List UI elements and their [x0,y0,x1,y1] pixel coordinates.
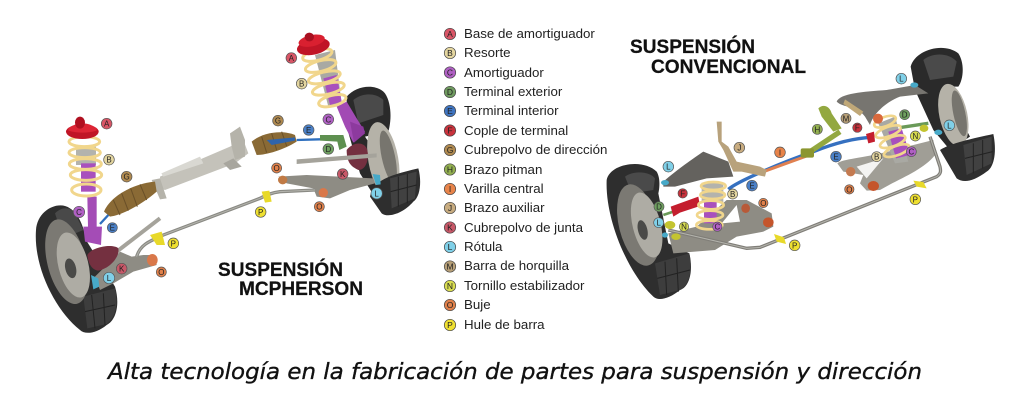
callouts: E [749,182,755,191]
callouts: G [124,173,130,182]
legend: O [447,300,454,310]
footer tagline: Alta tecnología en la fabricación de partes para suspensión y dirección [106,360,922,385]
legend: Cubrepolvo de dirección [464,142,607,157]
legend: G [447,145,453,155]
legend: Barra de horquilla [464,258,570,273]
callouts: L [656,219,661,228]
legend: Resorte [464,45,511,60]
far lower arm [837,140,935,191]
callouts: F [680,189,685,198]
callouts: O [158,268,164,277]
legend: Varilla central [464,181,544,196]
callouts: J [737,144,741,153]
callouts: P [913,195,918,204]
legend: Cubrepolvo de junta [464,220,584,235]
left strut with spring [66,117,102,245]
callouts: N [912,132,918,141]
near wheel [607,164,691,299]
callouts: K [340,170,346,179]
callouts [73,53,382,284]
legend: L [448,242,453,252]
inner tie rods [100,139,320,224]
legend: N [447,281,453,291]
callouts: H [814,125,820,134]
stabilizer bar [137,176,328,257]
stabilizer bar [665,125,941,248]
callouts: B [106,156,112,165]
legend: B [447,48,453,58]
callouts: D [325,145,331,154]
legend: Cople de terminal [464,123,568,138]
far upper arm [837,85,928,125]
callouts: L [947,121,952,130]
callouts: E [833,153,839,162]
callouts: P [258,208,263,217]
title: Suspensión convencional [630,36,806,78]
callouts: O [760,199,766,208]
left control arm [95,218,160,290]
callouts: C [325,115,331,124]
callouts: O [316,203,322,212]
legend: Tornillo estabilizador [464,278,585,293]
callouts: L [666,163,671,172]
callouts: C [76,208,82,217]
legend: D [447,87,453,97]
steering linkage [663,99,928,217]
legend: Terminal exterior [464,84,563,99]
callouts: B [874,153,879,162]
callouts: O [274,164,280,173]
callouts: E [110,224,115,233]
callouts: D [656,203,662,212]
legend: E [447,106,453,116]
callouts: P [792,241,797,250]
legend: H [447,164,453,174]
left wheel [36,205,117,333]
bushings and ball joints [661,82,942,238]
legend: Brazo pitman [464,162,542,177]
steering rack [152,127,248,199]
legend: A [447,29,453,39]
left joint boot [87,246,119,271]
legend [444,26,607,332]
title: Suspensión McPherson [218,259,363,300]
legend: Base de amortiguador [464,26,595,41]
near upper arm [663,152,733,187]
diagram: McPherson suspension [36,32,420,333]
far wheel [911,48,995,181]
callouts: L [374,189,379,198]
legend: I [449,184,451,194]
right control arm [278,175,375,198]
title: Suspensión McPherson: MCPHERSON [239,279,363,300]
right strut with spring [295,32,365,143]
legend: Buje [464,297,491,312]
legend: Terminal interior [464,103,559,118]
legend: Hule de barra [464,317,545,332]
legend: K [447,222,453,232]
callouts: P [171,239,176,248]
callouts: A [289,54,295,63]
legend: Amortiguador [464,65,544,80]
callouts: A [104,120,110,129]
legend: M [446,262,454,272]
ball joint [91,275,99,289]
legend: P [447,320,453,330]
callouts: C [714,223,720,232]
diagram: conventional suspension [607,48,995,299]
callouts: F [855,124,860,133]
callouts: K [119,265,125,274]
callouts: E [306,126,311,135]
legend: Rótula [464,239,503,254]
callouts: I [779,148,781,157]
callouts: N [681,223,687,232]
callouts: G [275,117,281,126]
right wheel [347,87,420,215]
title: Suspensión convencional: SUSPENSIÓN [630,36,755,58]
near spring and damper [696,182,726,229]
legend: C [447,68,453,78]
legend: Brazo auxiliar [464,200,545,215]
callouts [654,73,955,251]
title: Suspensión convencional: CONVENCIONAL [651,57,806,78]
right hub with boot and tie rod end [297,135,377,170]
near lower arm [668,200,773,253]
callouts: D [902,111,908,120]
callouts: B [299,80,304,89]
callouts: M [843,114,849,123]
callouts: C [908,148,914,157]
legend: J [448,203,452,213]
far spring and damper [873,113,911,163]
legend: F [447,126,453,136]
steering boots [104,132,297,217]
title: Suspensión McPherson: SUSPENSIÓN [218,259,343,281]
callouts: L [899,75,904,84]
callouts: O [846,185,852,194]
callouts: B [730,190,735,199]
callouts: L [107,274,112,283]
